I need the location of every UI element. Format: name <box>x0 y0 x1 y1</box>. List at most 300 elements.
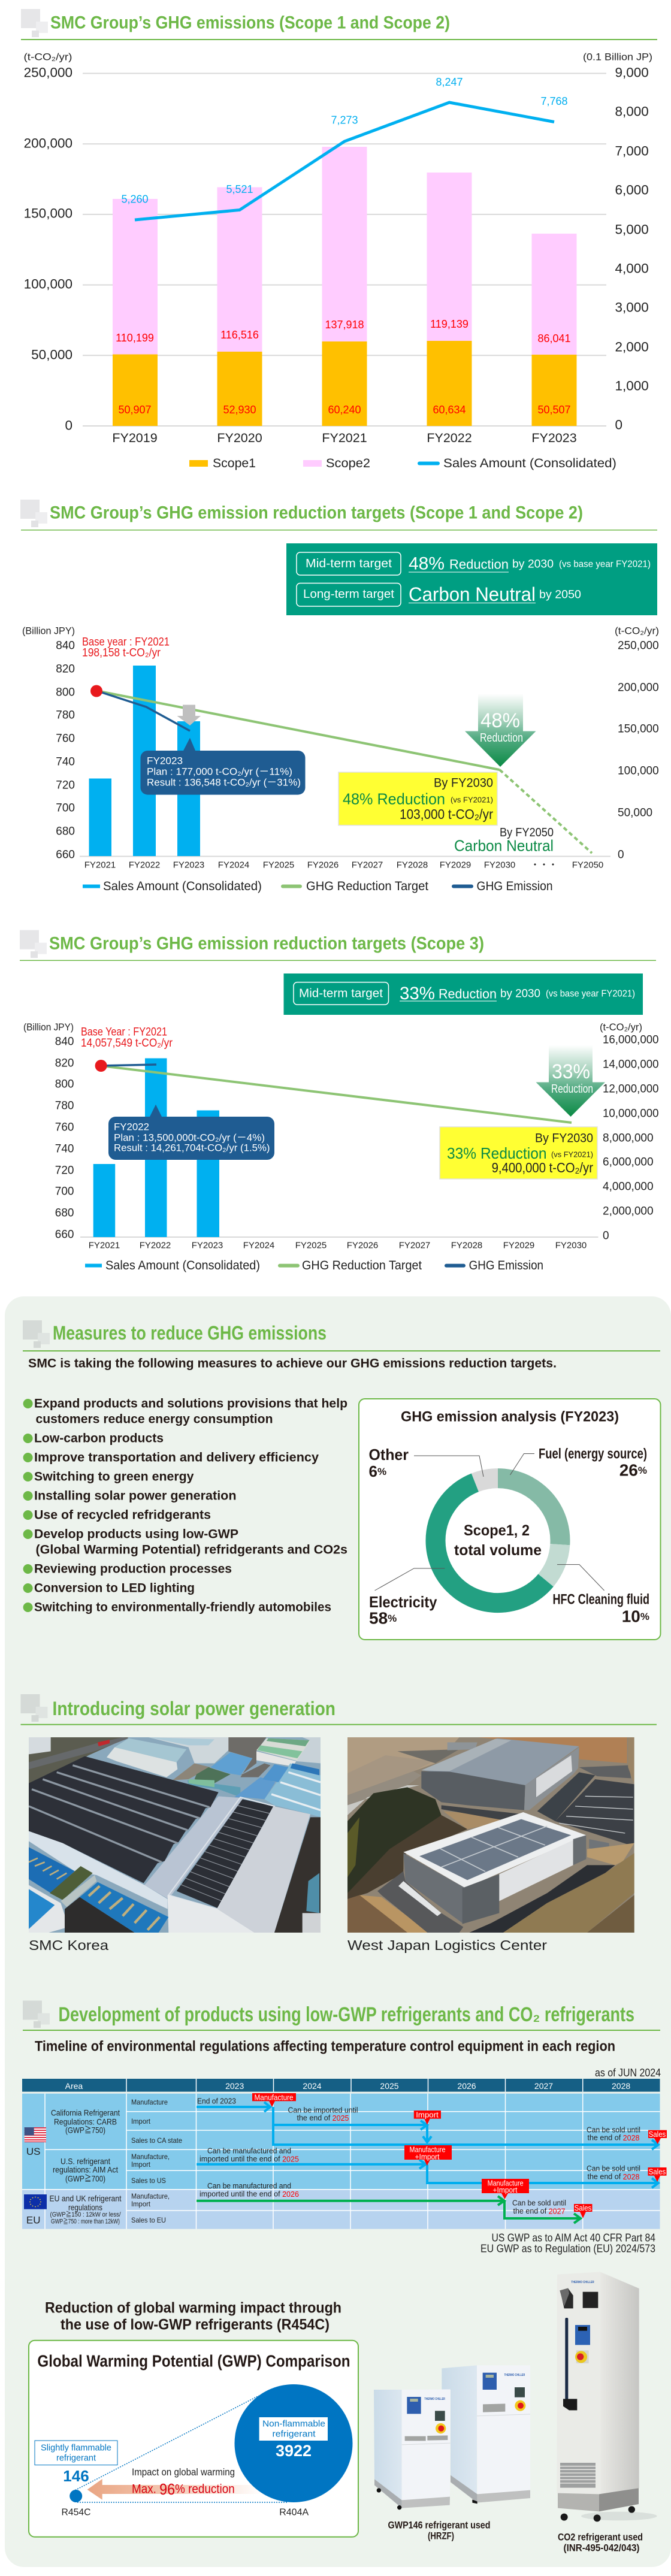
panel: GHG emission analysis: 10% <box>622 1607 649 1626</box>
chart: stacked bars with sales line: 6,000 <box>615 182 649 198</box>
bars: sales <box>93 1058 219 1237</box>
chart: sales bars and GHG targets: 840 <box>56 640 75 652</box>
line: sales amount <box>121 76 568 220</box>
arrow: 33% reduction <box>536 1045 605 1117</box>
annotations: timeline text: the end of 2028 <box>587 2172 640 2181</box>
annotations: timeline text: End of 2023 <box>197 2097 236 2105</box>
section: measures to reduce GHG emissions <box>23 1320 660 1640</box>
chart: sales bars and GHG targets: FY2026 <box>307 860 338 870</box>
heading: reduction targets scope 1 and 2: SMC Group’s GHG emission reduction targets (Scope 1 and Scope 2) <box>50 503 583 522</box>
chart: sales bars and scope 3 target: FY2028 <box>451 1240 482 1251</box>
chart: sales bars and scope 3 target: 8,000,000 <box>603 1132 654 1144</box>
arrows: US timeline <box>197 2102 658 2188</box>
chart: sales bars and GHG targets: FY2029 <box>440 860 471 870</box>
target box: (vs base year FY2021) <box>546 988 635 999</box>
legend: GHG Reduction Target <box>302 1259 422 1272</box>
target box: Carbon Neutral <box>409 583 536 605</box>
callout: by FY2030: (vs FY2021) <box>551 1150 593 1159</box>
chart: stacked bars with sales line: 8,000 <box>615 104 649 119</box>
bullet list: Reviewing production processes <box>34 1562 232 1576</box>
bar value labels: 137,918 <box>325 319 364 331</box>
bars: Scope 2 <box>113 147 576 355</box>
circle: R404A: refrigerant <box>272 2429 316 2439</box>
table body <box>22 2094 660 2229</box>
label: by FY2050: Carbon Neutral <box>454 836 554 854</box>
panel: GHG emission analysis: Electricity <box>369 1593 437 1611</box>
chart: sales bars and GHG targets: 200,000 <box>618 682 659 694</box>
line: GHG emission <box>101 1065 156 1066</box>
chart: sales bars and GHG targets: 680 <box>56 826 75 837</box>
chart: sales bars and GHG targets: 660 <box>56 848 75 861</box>
bar value labels: 50,507 <box>537 404 571 416</box>
dotted guides <box>75 2396 288 2502</box>
caption: CO2 chiller: (INR-495-042/043) <box>563 2542 640 2553</box>
table body: U.S. refrigerant <box>61 2157 110 2166</box>
chart: sales bars and scope 3 target: 10,000,000 <box>603 1107 659 1120</box>
table header: Area <box>65 2081 83 2091</box>
bar value labels: 86,041 <box>537 332 571 344</box>
line: reduction target <box>101 1066 572 1123</box>
annotations: timeline text: imported until the end of 2025 <box>200 2154 299 2163</box>
callout: FY2022 <box>108 1105 274 1160</box>
table body: Sales to EU <box>131 2216 166 2224</box>
table header: 2026 <box>457 2081 476 2091</box>
panel: GWP comparison <box>29 2341 358 2537</box>
heading: reduction targets scope 1 and 2 <box>20 500 657 531</box>
chart: sales bars and scope 3 target: 840 <box>55 1035 74 1048</box>
target box <box>284 973 643 1015</box>
arrow: 33% reduction: Reduction <box>551 1083 593 1096</box>
callout: FY2023: Plan : 177,000 t-CO₂/yr (－11%) <box>147 766 292 778</box>
callout: by FY2030: (vs FY2021) <box>451 796 493 804</box>
chart: sales bars and scope 3 target: FY2023 <box>192 1240 223 1251</box>
chart: stacked bars with sales line: 3,000 <box>615 300 649 315</box>
bullet list: Use of recycled refridgerants <box>34 1508 211 1522</box>
bar value labels: 60,240 <box>328 404 361 416</box>
arrow: FY2023 marker <box>177 705 201 725</box>
caption: HRZF: GWP146 refrigerant used <box>388 2520 490 2530</box>
table body: (GWP≧750) <box>65 2125 105 2135</box>
annotations: timeline text: the end of 2025 <box>297 2114 349 2122</box>
chart: sales bars and scope 3 target: FY2026 <box>347 1240 378 1251</box>
chart: sales bars and scope 3 target: FY2025 <box>295 1240 327 1251</box>
legend <box>85 1259 543 1272</box>
chart: sales bars and GHG targets: FY2027 <box>352 860 383 870</box>
circle: R404A: Non-flammable <box>262 2419 325 2429</box>
table body: Import <box>131 2117 151 2125</box>
bars: sales <box>89 666 200 856</box>
legend: Sales Amount (Consolidated) <box>443 456 616 470</box>
section: solar power generation <box>20 1694 657 1953</box>
chart: sales bars and GHG targets: FY2023 <box>173 860 204 870</box>
callout: by FY2030: 103,000 t-CO₂/yr <box>400 806 493 822</box>
chart: sales bars and scope 3 target: (Billion JPY) <box>23 1021 74 1033</box>
label: by FY2050: By FY2050 <box>500 826 554 839</box>
flags: red deadline labels: Sales <box>649 2167 666 2176</box>
annotations: timeline text: Can be sold until <box>587 2125 640 2134</box>
photo: West Japan Logistics Center: West Japan Logistics Center <box>347 1937 547 1953</box>
table body: California Refrigerant <box>51 2108 120 2118</box>
panel: GHG emission analysis: Other <box>369 1446 409 1464</box>
table body: (GWP≧700) <box>65 2174 105 2184</box>
chart: stacked bars with sales line: 250,000 <box>24 65 72 80</box>
chart: sales bars and GHG targets: 820 <box>56 663 75 676</box>
bullet list: Installing solar power generation <box>34 1489 237 1502</box>
photo: SMC Korea <box>29 1737 321 1953</box>
circle: R404A: 3922 <box>276 2442 312 2460</box>
subheading: timeline: Timeline of environmental regulations affecting temperature control equipment in each region <box>35 2038 615 2055</box>
table body: EU <box>26 2214 41 2226</box>
legend: GHG Emission <box>477 879 552 893</box>
chart: sales bars and GHG targets: 250,000 <box>618 640 659 652</box>
chart: sales bars and GHG targets: (t-CO₂/yr) <box>615 625 659 636</box>
annotations: timeline text: Can be imported until <box>288 2105 358 2115</box>
chart: sales bars and GHG targets: FY2025 <box>263 860 294 870</box>
callout: FY2023 <box>140 738 306 795</box>
chart: sales bars and scope 3 target: 760 <box>55 1121 74 1133</box>
panel: GHG emission analysis: GHG emission analysis (FY2023) <box>401 1409 619 1425</box>
panel: GHG emission analysis: 26% <box>619 1461 647 1480</box>
heading: measures <box>23 1320 660 1352</box>
table body: regulations: AIM Act <box>53 2165 118 2175</box>
bullet list: customers reduce energy consumption <box>36 1413 273 1426</box>
legend: GHG Reduction Target <box>306 879 428 893</box>
bar value labels: 60,634 <box>433 404 466 416</box>
annotations: timeline text: imported until the end of 2026 <box>200 2189 299 2199</box>
target box: Reduction <box>439 986 497 1002</box>
chart: sales bars and scope 3 target: FY2030 <box>555 1240 587 1251</box>
callout: FY2022: Plan : 13,500,000t-CO₂/yr (－4%) <box>114 1132 265 1143</box>
flags: red deadline labels: Sales <box>649 2130 666 2139</box>
chart: stacked bars with sales line <box>24 52 652 470</box>
line: reduction target <box>96 691 592 853</box>
bar value labels: 119,139 <box>430 318 469 330</box>
chart: sales bars and GHG targets: FY2024 <box>218 860 249 870</box>
chiller: CO2 <box>557 2272 657 2521</box>
subheading: reduction of global warming impact: Reduction of global warming impact through <box>45 2300 341 2317</box>
arrow: 48% reduction: Reduction <box>480 731 523 745</box>
section: Scope 1 and 2 targets <box>20 500 659 893</box>
arrow: 48% reduction: 48% <box>480 709 520 732</box>
chart: stacked bars with sales line: FY2023 <box>531 431 577 445</box>
chart: sales bars and scope 3 target: 680 <box>55 1207 74 1220</box>
bullet list: (Global Warming Potential) refridgerants and CO2s <box>36 1543 347 1556</box>
line: GHG emission <box>96 691 190 731</box>
intro text: SMC is taking the following measures to achieve our GHG emissions reduction targets. <box>28 1356 557 1371</box>
chart: stacked bars with sales line: FY2020 <box>217 431 262 445</box>
chart: sales bars and scope 3 target: FY2022 <box>140 1240 171 1251</box>
chart: sales bars and GHG targets: 100,000 <box>618 764 659 778</box>
heading: solar power: Introducing solar power generation <box>53 1698 336 1719</box>
photo: HRZF and CO2 chillers <box>374 2272 657 2522</box>
footnote: GWP sources <box>480 2232 655 2255</box>
callout: by FY2030: By FY2030 <box>434 776 493 790</box>
bars: Scope 1 <box>113 341 576 426</box>
chart: sales bars and scope 3 target: 700 <box>55 1185 74 1198</box>
table header: 2023 <box>225 2081 244 2091</box>
circle: R454C: 146 <box>63 2467 89 2485</box>
arrows: EU timeline <box>197 2196 581 2223</box>
icon: US flag <box>25 2127 46 2142</box>
section: Scope 1 and 2 emissions <box>21 9 657 470</box>
line: sales amount: 5,521 <box>226 183 253 195</box>
legend: Sales Amount (Consolidated) <box>105 1259 260 1272</box>
chart: sales bars and GHG targets: 800 <box>56 687 75 699</box>
chart: stacked bars with sales line: 50,000 <box>31 347 72 362</box>
base-year marker: 198,158 t-CO₂/yr <box>82 647 161 659</box>
annotations: timeline text: the end of 2027 <box>513 2206 566 2215</box>
bullet list: Switching to environmentally-friendly automobiles <box>34 1601 331 1614</box>
flags: red deadline labels: Manufacture <box>254 2093 294 2102</box>
target box: Mid-term target <box>299 987 383 1000</box>
chart: sales bars and scope 3 target: FY2027 <box>399 1240 430 1251</box>
chart: sales bars and scope 3 target: 660 <box>55 1228 74 1241</box>
label: impact on global warming: Max. 96% reduction <box>132 2480 235 2498</box>
table body: EU and UK refrigerant <box>49 2194 122 2203</box>
table body: Import <box>131 2200 151 2208</box>
chart: sales bars and GHG targets: (Billion JPY) <box>22 625 75 636</box>
chart: sales bars and GHG targets: FY2022 <box>129 860 160 870</box>
chart: sales bars and scope 3 target: 14,000,000 <box>603 1058 659 1071</box>
chart: stacked bars with sales line: 150,000 <box>24 206 72 220</box>
table body: Manufacture, <box>131 2152 170 2161</box>
table header <box>22 2079 660 2092</box>
table body: US <box>26 2146 41 2157</box>
chart: sales bars and GHG targets: FY2030 <box>484 860 515 870</box>
circle: R404A: R404A <box>279 2508 309 2517</box>
chart: stacked bars with sales line: 0 <box>65 418 72 433</box>
table header: 2027 <box>534 2081 553 2091</box>
annotations: timeline text: Can be sold until <box>587 2164 640 2173</box>
arrow: 33% reduction: 33% <box>552 1060 590 1083</box>
heading: measures: Measures to reduce GHG emissions <box>53 1322 327 1344</box>
bar value labels: 50,907 <box>118 404 152 416</box>
flags: red deadline labels: Manufacture <box>410 2145 446 2154</box>
base-year marker: 14,057,549 t-CO₂/yr <box>81 1037 173 1050</box>
chart: sales bars and GHG targets: ・・・ <box>530 860 558 870</box>
target box: 48% <box>409 554 445 574</box>
target box: by 2030 <box>512 558 554 570</box>
chart: sales bars and scope 3 target: 2,000,000 <box>603 1205 654 1217</box>
legend: Scope2 <box>326 456 370 470</box>
legend <box>83 879 552 893</box>
circle: R454C <box>35 2441 117 2517</box>
chart: sales bars and GHG targets: FY2050 <box>572 860 603 870</box>
table body: GWP≧750 : more than 12kW) <box>51 2217 120 2226</box>
photo: SMC Korea: SMC Korea <box>29 1937 108 1953</box>
table body: Sales to CA state <box>131 2136 182 2145</box>
table header: 2024 <box>303 2081 322 2091</box>
chart: stacked bars with sales line: 200,000 <box>24 135 72 151</box>
table body: (GWP≧150 : 12kW or less/ <box>50 2210 121 2218</box>
section: Scope 3 targets <box>20 930 659 1272</box>
chart: sales bars and GHG targets: 150,000 <box>618 722 659 736</box>
bullet list: Expand products and solutions provisions that help <box>34 1397 347 1410</box>
chiller: HRZF large <box>442 2365 530 2504</box>
chiller: CO2: THERMO CHILLER <box>571 2281 594 2284</box>
caption: HRZF <box>388 2520 490 2541</box>
heading: reduction targets scope 3 <box>20 930 656 961</box>
panel: GWP comparison: Global Warming Potential (GWP) Comparison <box>37 2352 350 2370</box>
line: sales amount: 7,273 <box>331 114 358 126</box>
chart: sales bars and scope 3 target: 740 <box>55 1143 74 1155</box>
chart: sales bars and GHG targets: 760 <box>56 732 75 745</box>
chart: sales bars and GHG targets: 740 <box>56 756 75 768</box>
panel: GHG emission analysis: 58% <box>369 1609 397 1627</box>
target box: by 2050 <box>539 588 581 601</box>
chart: sales bars and GHG targets: FY2021 <box>84 860 116 870</box>
label: impact on global warming <box>132 2466 235 2498</box>
legend: Scope1 <box>213 456 256 470</box>
bar value labels: 52,930 <box>223 404 256 416</box>
panel: measures background <box>5 1296 671 2567</box>
chart: stacked bars with sales line: FY2019 <box>112 431 158 445</box>
circle: R454C: refrigerant <box>56 2453 96 2463</box>
chart: sales bars and GHG targets: 700 <box>56 802 75 815</box>
chart: sales bars and GHG targets: FY2028 <box>397 860 428 870</box>
heading: SMC Group's GHG emissions <box>21 9 657 40</box>
bullet list: Low-carbon products <box>34 1432 164 1445</box>
chart: stacked bars with sales line: 0 <box>615 417 622 433</box>
photo: West Japan Logistics Center <box>347 1737 637 1953</box>
chart: sales bars and scope 3 target: FY2021 <box>89 1240 120 1251</box>
legend <box>189 456 616 470</box>
flags: red deadline labels: +Import <box>415 2152 440 2161</box>
target box: (vs base year FY2021) <box>559 560 651 569</box>
panel: GHG emission analysis: 6% <box>369 1462 386 1480</box>
chiller: HRZF large: THERMO CHILLER <box>504 2374 525 2377</box>
chart: stacked bars with sales line: (t-CO₂/yr) <box>24 52 72 62</box>
panel: GHG emission analysis <box>359 1399 660 1640</box>
panel: GHG emission analysis: total volume <box>454 1542 542 1559</box>
chart: stacked bars with sales line: 2,000 <box>615 339 649 355</box>
line: sales amount: 8,247 <box>436 76 463 88</box>
table body: Regulations: CARB <box>54 2117 117 2127</box>
icon: EU flag <box>24 2194 47 2209</box>
subheading: reduction of global warming impact <box>45 2300 341 2333</box>
table header: 2025 <box>380 2081 399 2091</box>
bar value labels: 110,199 <box>116 332 154 344</box>
subheading: reduction of global warming impact: the use of low-GWP refrigerants (R454C) <box>61 2317 330 2333</box>
annotations: timeline text <box>197 2097 640 2215</box>
base-year marker <box>82 636 170 697</box>
chart: sales bars and scope 3 target: 4,000,000 <box>603 1180 654 1193</box>
flags: red deadline labels: Manufacture <box>488 2178 524 2188</box>
circle: R404A <box>235 2384 352 2517</box>
callout: by FY2030: 48% Reduction <box>343 790 445 808</box>
chiller: HRZF small <box>374 2389 451 2510</box>
annotations: timeline text: Can be manufactured and <box>207 2146 291 2155</box>
base-year marker <box>81 1026 173 1072</box>
annotations: timeline text: the end of 2028 <box>587 2133 640 2142</box>
chart: sales bars and GHG targets: 720 <box>56 779 75 792</box>
chart: sales bars and scope 3 target: FY2024 <box>243 1240 274 1251</box>
circle: R454C: R454C <box>61 2508 91 2517</box>
chart: stacked bars with sales line: (0.1 Billion JP) <box>583 52 652 62</box>
callout: FY2023: FY2023 <box>147 755 183 767</box>
chart: sales bars and scope 3 target: 780 <box>55 1100 74 1112</box>
section: low-GWP products <box>22 2001 667 2553</box>
legend: GHG Emission <box>469 1259 543 1272</box>
chart: sales bars and scope 3 target: 800 <box>55 1078 74 1090</box>
chart: sales bars and GHG targets: 0 <box>618 848 624 861</box>
caption: CO2 chiller: CO2 refrigerant used <box>558 2532 643 2542</box>
circle: R454C: Slightly flammable <box>41 2443 111 2453</box>
chart: sales bars and GHG targets: 50,000 <box>618 806 652 820</box>
table body: Manufacture <box>131 2098 168 2106</box>
heading: solar power <box>20 1694 657 1725</box>
chart: stacked bars with sales line: 1,000 <box>615 379 649 393</box>
target box: Reduction <box>449 557 509 572</box>
donut chart <box>436 1479 560 1603</box>
table body: Import <box>131 2160 151 2169</box>
bullet list: Switching to green energy <box>34 1470 194 1483</box>
chart: stacked bars with sales line: 5,000 <box>615 222 649 237</box>
target box: 33% <box>400 984 435 1003</box>
caption: CO2 chiller <box>558 2532 643 2553</box>
caption: HRZF: (HRZF) <box>428 2530 454 2541</box>
flags: red deadline labels: +Import <box>492 2185 518 2194</box>
bar value labels <box>116 318 571 416</box>
as-of note: as of JUN 2024 <box>595 2067 661 2079</box>
chart: stacked bars with sales line: FY2022 <box>427 431 472 445</box>
table body: regulations <box>68 2203 102 2212</box>
flags: red deadline labels <box>252 2093 667 2218</box>
chart: sales bars and scope 3 target: 6,000,000 <box>603 1156 654 1168</box>
bullet list <box>23 1397 347 1614</box>
arrow: 48% reduction <box>465 694 536 767</box>
bullet list: Develop products using low-GWP <box>34 1528 238 1541</box>
label: by FY2050 <box>454 826 554 854</box>
chart: stacked bars with sales line: 4,000 <box>615 261 649 276</box>
chart: sales bars and GHG targets <box>22 625 659 893</box>
table body: Sales to US <box>131 2176 166 2185</box>
table: regulations timeline <box>22 2079 667 2229</box>
chiller: HRZF small: THERMO CHILLER <box>424 2397 445 2401</box>
chart: sales bars and scope 3 target: 0 <box>603 1229 609 1242</box>
chart: sales bars and scope 3 target: 16,000,000 <box>603 1034 659 1046</box>
flags: red deadline labels: Import <box>416 2110 439 2120</box>
callout: FY2023: Result : 136,548 t-CO₂/yr (－31%) <box>147 776 301 788</box>
chart: stacked bars with sales line: FY2021 <box>322 431 367 445</box>
annotations: timeline text: Can be sold until <box>512 2199 566 2207</box>
flags: red deadline labels: Sales <box>575 2203 592 2212</box>
callout: by FY2030: 33% Reduction <box>447 1144 546 1162</box>
chart: sales bars and scope 3 target: 820 <box>55 1057 74 1070</box>
chart: stacked bars with sales line: 100,000 <box>24 277 72 291</box>
arrow: max 96% reduction <box>87 2479 262 2500</box>
heading: reduction targets scope 3: SMC Group’s GHG emission reduction targets (Scope 3) <box>49 933 484 954</box>
bar value labels: 116,516 <box>220 329 259 341</box>
bullet list: Improve transportation and delivery efficiency <box>34 1451 319 1464</box>
bullet list: Conversion to LED lighting <box>34 1582 195 1595</box>
label: impact on global warming: Impact on global warming <box>132 2466 235 2478</box>
annotations: timeline text: Can be manufactured and <box>207 2181 291 2190</box>
target box: Long-term target <box>303 588 394 601</box>
callout: by FY2030 <box>338 772 497 826</box>
chart: sales bars and scope 3 target <box>23 1021 659 1272</box>
chart: sales bars and scope 3 target: 12,000,000 <box>603 1083 659 1095</box>
callout: FY2022: Result : 14,261,704t-CO₂/yr (1.5%) <box>114 1142 270 1154</box>
callout: by FY2030: 9,400,000 t-CO₂/yr <box>492 1160 593 1175</box>
target box: by 2030 <box>500 987 540 1000</box>
base-year marker: Base Year : FY2021 <box>81 1026 167 1039</box>
legend: Sales Amount (Consolidated) <box>103 879 262 893</box>
table header: 2028 <box>612 2081 630 2091</box>
target box: Mid-term target <box>306 557 392 570</box>
target box <box>286 543 657 615</box>
callout: by FY2030: By FY2030 <box>535 1131 593 1145</box>
